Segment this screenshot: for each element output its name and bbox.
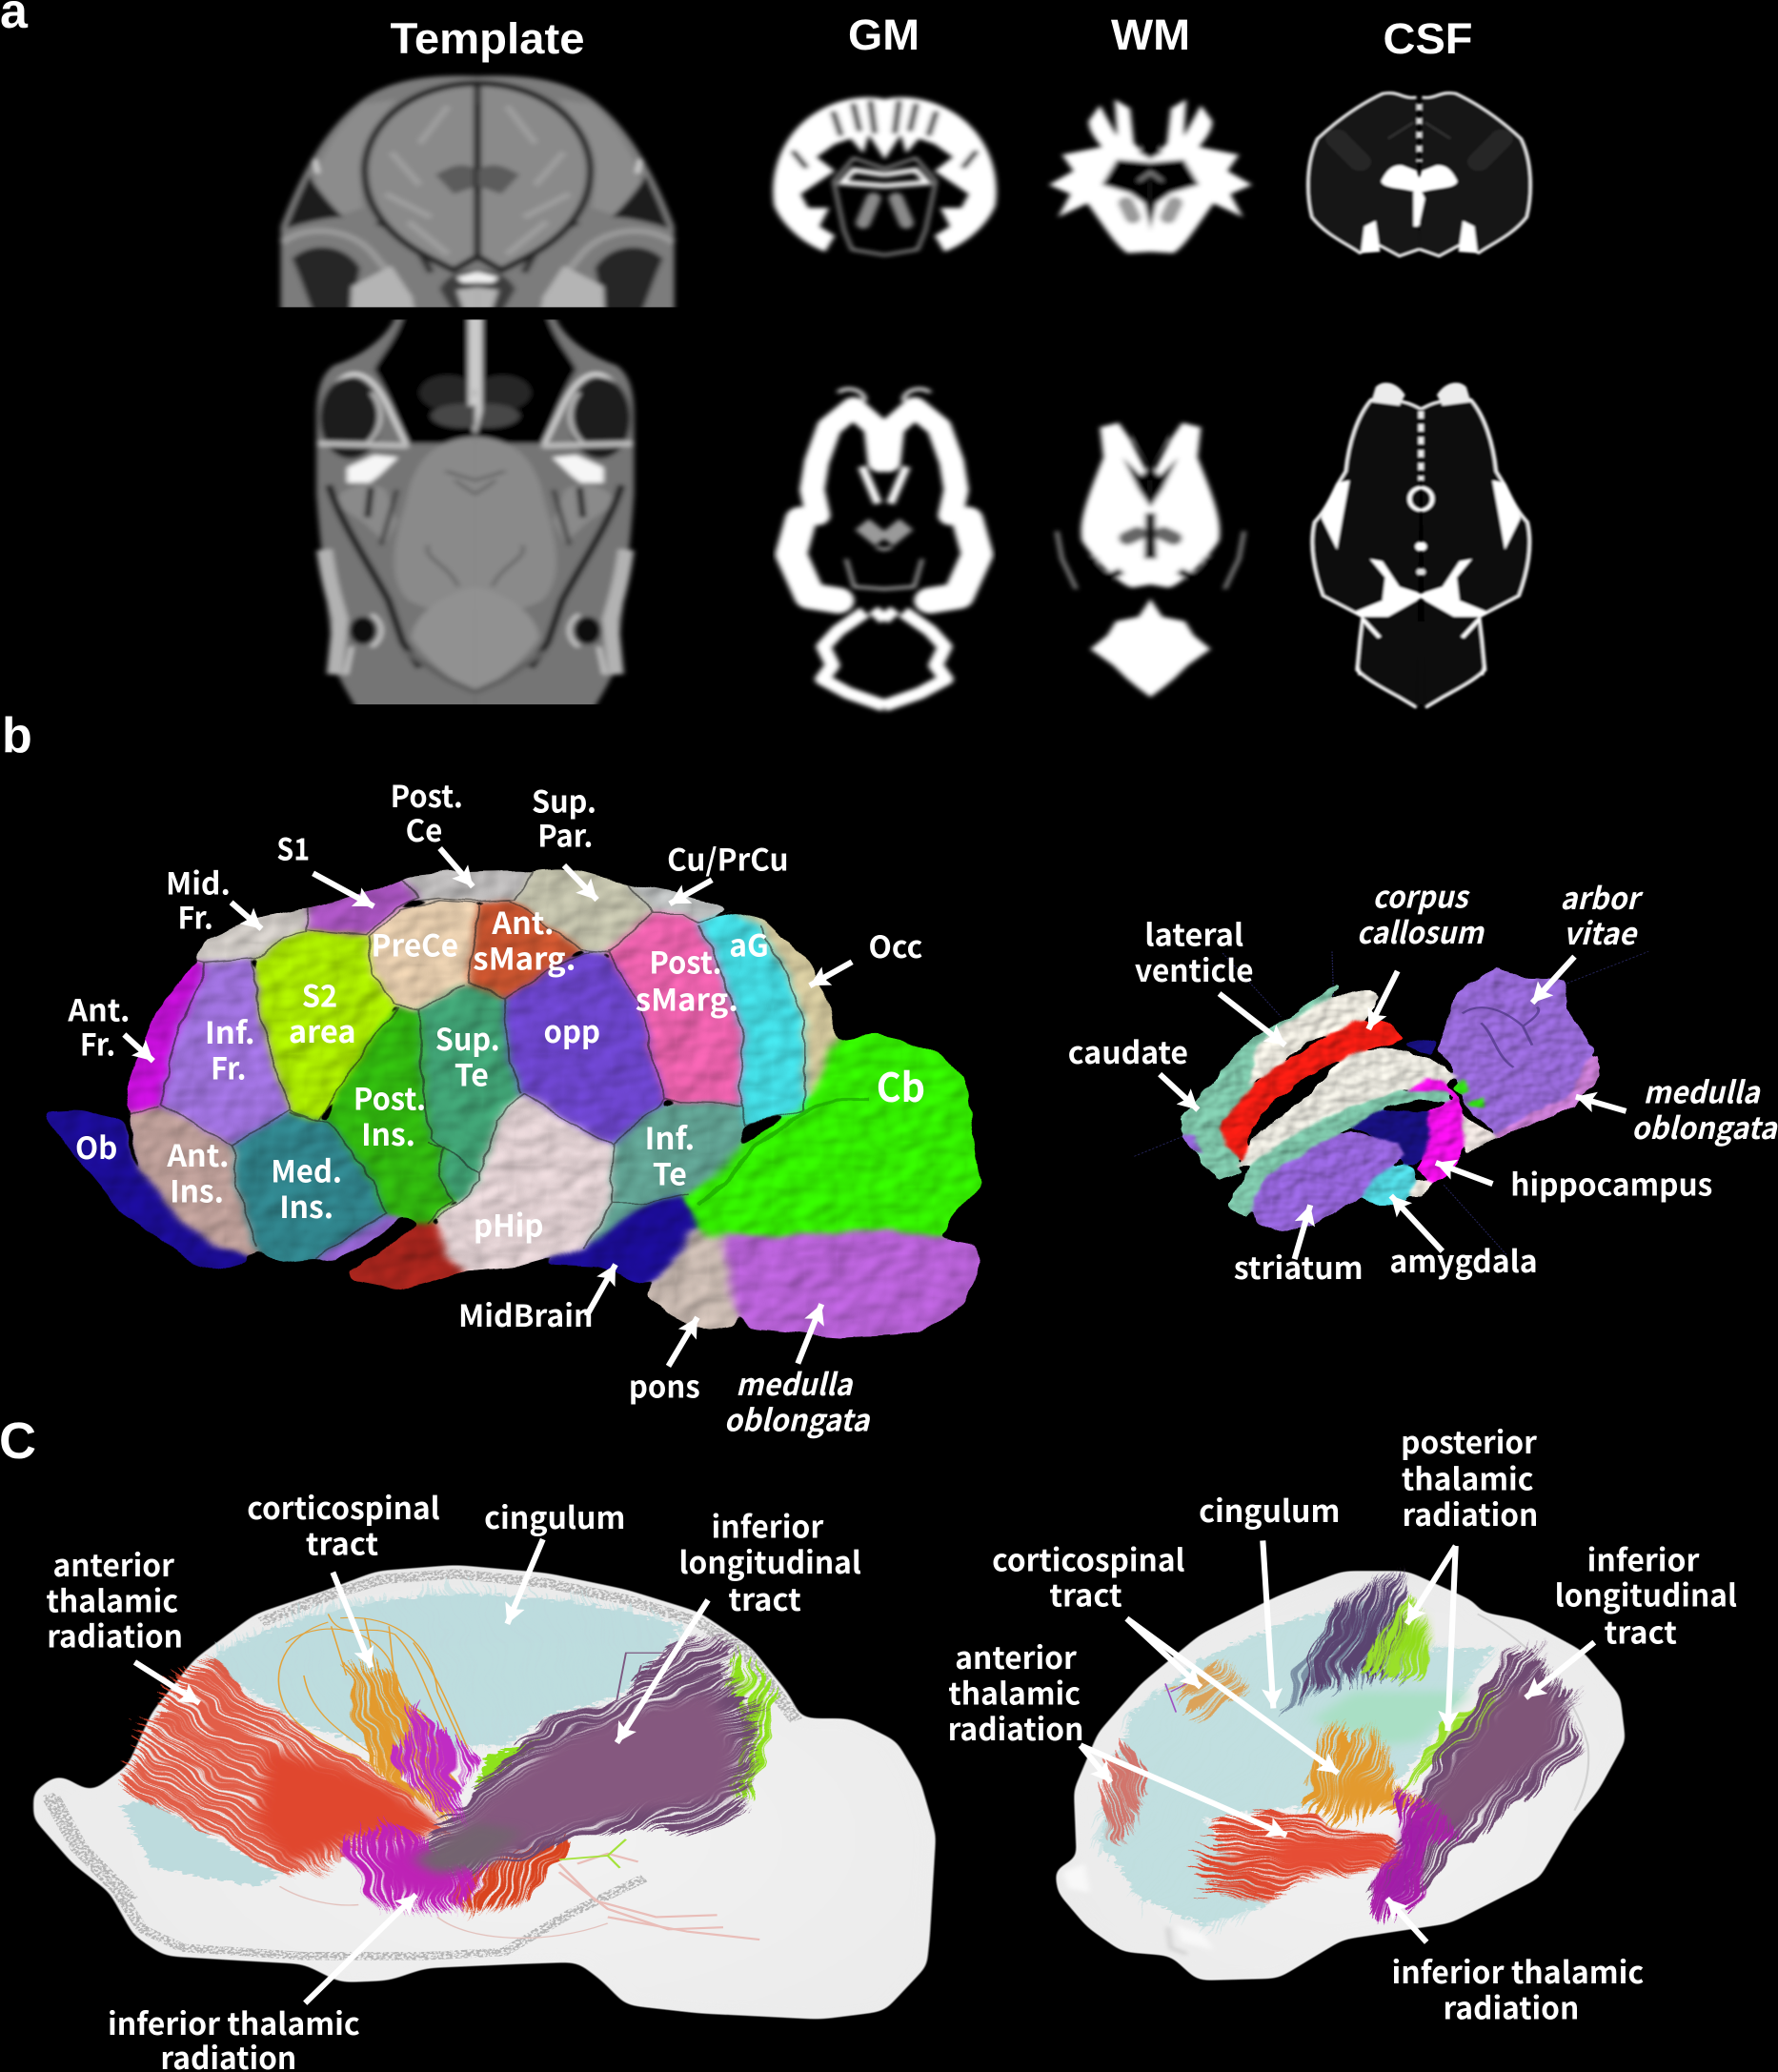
label: anterior thalamic radiation [948, 1635, 1286, 1836]
tract: green top [1331, 1575, 1460, 1689]
region: Sup. Te [418, 985, 522, 1201]
region: Occ [731, 907, 834, 1098]
structure: corpus callosum [1221, 1022, 1404, 1163]
label: striatum: striatum [1234, 1245, 1364, 1289]
label: inferior longitudinal tract: tract [729, 1576, 801, 1620]
label: Ob: Ob [75, 1125, 117, 1168]
tract: anterior thalamic fibres [1186, 1790, 1413, 1921]
label: Ant. Ins.: Ant. [166, 1132, 230, 1176]
label: MidBrain [458, 1265, 616, 1336]
WM axial map [1057, 416, 1244, 698]
label: amygdala [1389, 1196, 1538, 1282]
label: Ant. Ins. [166, 1132, 230, 1212]
panel letter b: b [2, 708, 32, 763]
label: anterior thalamic radiation: thalamic [948, 1670, 1081, 1714]
label: caudate: caudate [1068, 1029, 1188, 1073]
region: Inf. Fr. [161, 961, 290, 1145]
label: hippocampus: hippocampus [1510, 1162, 1712, 1206]
label: S2 area [289, 972, 356, 1052]
label: opp: opp [543, 1008, 600, 1052]
label: anterior thalamic radiation: radiation [47, 1614, 183, 1657]
structure: hippocampus [1411, 1077, 1465, 1184]
tract: corticospinal fibres [1270, 1704, 1459, 1843]
label: Post. Ce: Ce [406, 807, 442, 851]
template coronal slice [281, 75, 675, 333]
tract: green mid [1337, 1646, 1573, 1828]
tract: inferior longitudinal core [1413, 1683, 1561, 1847]
label: cingulum [484, 1494, 625, 1624]
label: posterior thalamic radiation: radiation [1403, 1492, 1538, 1535]
label: aG: aG [729, 923, 769, 966]
region: MidBrain [541, 1196, 698, 1285]
label: anterior thalamic radiation: anterior [52, 1542, 174, 1586]
subcortical surface rendering [1134, 951, 1648, 1255]
tract: small orange strands [1139, 1631, 1288, 1744]
tract: green centre [474, 1737, 541, 1790]
label: Ant. sMarg.: Ant. [491, 900, 555, 944]
tract blend core [414, 1823, 523, 1874]
tract: cingulum fibres [917, 1473, 1678, 2055]
label: MidBrain: MidBrain [458, 1292, 593, 1336]
label: inferior longitudinal tract [1525, 1536, 1737, 1697]
region: aG [702, 912, 805, 1125]
brain surface parcellation [44, 867, 984, 1338]
structure: amygdala [1360, 1165, 1416, 1208]
region: Cb [689, 1034, 982, 1247]
tract: inferior thalamic fibres [1322, 1771, 1510, 1940]
region: S2 area [257, 930, 393, 1121]
silhouette speckled rim [49, 1574, 797, 1956]
tract: anterior thalamic core [1279, 1839, 1391, 1872]
region: Ob [44, 1109, 252, 1271]
label: inferior thalamic radiation: inferior thalamic [1391, 1949, 1644, 1993]
heading: WM: WM [1111, 10, 1190, 59]
label: Sup. Par. [532, 779, 597, 900]
label: corticospinal tract [247, 1485, 440, 1668]
template axial slice [316, 305, 634, 721]
tract rendering right [917, 1473, 1720, 2055]
label: Med. Ins.: Med. [271, 1148, 342, 1192]
tract: inferior thalamic lower core [376, 1839, 462, 1897]
label: anterior thalamic radiation [47, 1542, 199, 1703]
strands near top of ILF [616, 1653, 665, 1700]
tract: inferior longitudinal fibres [1224, 1575, 1720, 1963]
tract: anterior thalamic radiation lower [413, 1815, 599, 1941]
label: inferior longitudinal tract: inferior [1587, 1536, 1700, 1580]
glass brain silhouette [1055, 1571, 1626, 1981]
label: anterior thalamic radiation: radiation [948, 1706, 1083, 1750]
label: Cb: Cb [877, 1056, 925, 1113]
label: Med. Ins.: Ins. [279, 1184, 333, 1228]
label: inferior longitudinal tract: longitudinal [679, 1539, 861, 1583]
label: medulla oblongata: oblongata [724, 1396, 871, 1440]
tract: inferior thalamic upper [360, 1698, 503, 1833]
label: Med. Ins. [271, 1148, 342, 1228]
structure: cream small [1411, 1179, 1432, 1198]
label: Post. Ins.: Ins. [361, 1111, 415, 1155]
label: corticospinal tract: tract [306, 1521, 378, 1565]
cerebellum fold [702, 1098, 870, 1205]
label: S2 area: S2 [302, 972, 337, 1016]
region: medulla oblongata [721, 1229, 984, 1338]
label: inferior thalamic radiation: radiation [1444, 1984, 1579, 2028]
faint axis lines [1134, 951, 1648, 1255]
label: striatum [1234, 1205, 1364, 1289]
tract: corticospinal core [1326, 1770, 1397, 1809]
label: lateral venticle: lateral [1144, 912, 1243, 956]
CSF coronal map [1308, 92, 1531, 256]
region: pHip [438, 1094, 616, 1271]
label: posterior thalamic radiation: thalamic [1402, 1456, 1533, 1500]
tract: inferior longitudinal fibres [248, 1529, 925, 1986]
label: amygdala: amygdala [1389, 1238, 1538, 1282]
label: inferior longitudinal tract: longitudinal [1555, 1573, 1737, 1616]
label: Mid. Fr.: Fr. [177, 895, 213, 939]
labels and arrows [47, 1485, 861, 2072]
label: PreCe: PreCe [372, 923, 458, 966]
label: pHip: pHip [474, 1203, 543, 1247]
inner contour of cerebellum [1478, 1614, 1588, 1811]
label: Post. sMarg.: Post. [649, 940, 722, 984]
structure: medulla oblongata [1495, 1055, 1600, 1139]
label: Post. sMarg. [636, 940, 738, 1021]
label: medulla oblongata: medulla [1644, 1069, 1762, 1113]
tract: cingulum fibres [163, 1539, 724, 1820]
label: pons [629, 1317, 700, 1408]
label: corticospinal tract [992, 1536, 1338, 1773]
label: corticospinal tract: corticospinal [247, 1485, 440, 1529]
tract: posterior thalamic top [1263, 1556, 1445, 1713]
panel b: cortical atlas left view [2, 708, 984, 1440]
panel a: template and tissue maps [0, 0, 1531, 721]
label: inferior longitudinal tract [616, 1504, 861, 1743]
panel b: subcortical structures right view [1068, 873, 1778, 1289]
label: S1 [276, 825, 374, 906]
label: Ant. Ins.: Ins. [170, 1168, 224, 1212]
tract: green top core [1397, 1614, 1426, 1659]
tract: corticospinal core [267, 1636, 535, 1845]
label: Mid. Fr. [166, 861, 261, 939]
label: Sup. Te: Te [455, 1052, 489, 1096]
labels and arrows [948, 1419, 1737, 2028]
structure: navy midbrain [1351, 1110, 1434, 1166]
region: pons [644, 1229, 737, 1330]
region: Post. Ins. [329, 1008, 451, 1223]
label: Post. Ins.: Post. [354, 1075, 426, 1119]
region: Ant. sMarg. [467, 899, 583, 997]
heading: CSF: CSF [1384, 14, 1473, 63]
structure: green fragments [1453, 1079, 1484, 1107]
region seams [129, 870, 805, 1258]
region: PreCe [367, 901, 476, 1009]
tract: anterior thalamic radiation core [255, 1749, 437, 1864]
region: Cu/PrCu [628, 884, 728, 921]
label: Inf. Fr. [205, 1009, 255, 1089]
label: corticospinal tract: corticospinal [992, 1536, 1185, 1580]
label: cingulum: cingulum [1199, 1488, 1340, 1532]
structure: lateral ventricle upper [1248, 989, 1379, 1087]
region: Mid. Fr. [196, 906, 309, 963]
label: Inf. Te: Inf. [645, 1115, 695, 1159]
label: lateral venticle: venticle [1135, 947, 1254, 991]
label: Inf. Fr.: Fr. [211, 1046, 247, 1089]
region: Sup. Par. [515, 867, 651, 952]
label: medulla oblongata [724, 1304, 871, 1440]
tract rendering left [0, 1529, 936, 2020]
heading: GM: GM [848, 10, 919, 59]
label: corpus callosum [1357, 873, 1485, 1029]
GM axial map [791, 389, 978, 706]
arbor vitae folds [1463, 1007, 1539, 1067]
label: anterior thalamic radiation: anterior [955, 1635, 1077, 1678]
label: cingulum: cingulum [484, 1494, 625, 1538]
label: Ant. Fr. [67, 987, 153, 1066]
label: medulla oblongata [1576, 1069, 1778, 1148]
label: inferior thalamic radiation [1387, 1899, 1644, 2028]
label: Ant. Fr.: Ant. [67, 987, 131, 1031]
label: S1: S1 [276, 825, 310, 869]
label: pons: pons [629, 1364, 700, 1408]
label: medulla oblongata: medulla [736, 1361, 854, 1405]
region: opp [506, 951, 663, 1145]
label: Cu/PrCu [667, 837, 789, 904]
structure: caudate lower [1227, 1089, 1448, 1217]
tract: inferior longitudinal core [444, 1692, 738, 1864]
region: Inf. Te [586, 1105, 747, 1247]
region: ventral purple [315, 1216, 399, 1263]
tract: inferior thalamic lower fibres [318, 1798, 520, 1931]
faint pink tracts [559, 1854, 759, 1940]
label: inferior longitudinal tract: tract [1605, 1610, 1677, 1654]
region: Post. sMarg. [609, 914, 744, 1103]
label: cingulum [1199, 1488, 1340, 1708]
label: Occ [810, 924, 922, 985]
structure: arbor vitae [1437, 967, 1593, 1134]
label: Ant. sMarg.: sMarg. [473, 936, 576, 980]
tract: anterior thalamic strands left [1065, 1727, 1189, 1854]
label: Occ: Occ [868, 924, 922, 967]
tract: anterior thalamic radiation strands [0, 1546, 616, 1989]
structure: cream posterior [1458, 1112, 1497, 1153]
label: Inf. Te [645, 1115, 695, 1195]
tract: cingulum base [1101, 1602, 1494, 1925]
nose bulbs [1063, 1864, 1214, 1954]
label: Sup. Par.: Sup. [532, 779, 596, 823]
label: caudate [1068, 1029, 1198, 1109]
tract: cingulum base [122, 1594, 680, 1886]
label: posterior thalamic radiation: posterior [1401, 1419, 1537, 1463]
region: Med. Ins. [232, 1111, 387, 1263]
WM coronal map [1049, 99, 1252, 254]
corticospinal fine strands [278, 1614, 468, 1774]
label: corpus callosum: callosum [1357, 909, 1485, 953]
label: inferior longitudinal tract: inferior [712, 1504, 823, 1548]
region: Post. Ce [402, 870, 528, 901]
label: lateral venticle [1135, 912, 1285, 1046]
label: corpus callosum: corpus [1372, 873, 1470, 917]
label: arbor vitae [1532, 875, 1644, 1003]
region: Ant. Ins. [129, 1105, 257, 1256]
label: Sup. Te [435, 1016, 500, 1096]
label: Post. Ins. [354, 1075, 426, 1155]
label: Inf. Te: Te [653, 1151, 687, 1195]
structure: striatum [1250, 1131, 1404, 1232]
structure: lateral ventricle lower [1239, 1046, 1458, 1166]
labels and arrows [67, 773, 925, 1440]
label: Ant. Fr.: Fr. [80, 1022, 115, 1066]
region: S1 [309, 879, 418, 935]
structure: caudate [1181, 985, 1342, 1180]
label: Post. Ce [391, 773, 473, 886]
label: Cu/PrCu: Cu/PrCu [667, 837, 789, 881]
label: posterior thalamic radiation [1401, 1419, 1538, 1731]
tract: inferior thalamic core [1381, 1823, 1429, 1909]
panel letter C: C [0, 1412, 36, 1470]
label: inferior thalamic radiation [108, 1895, 416, 2072]
label: Mid. Fr.: Mid. [166, 861, 231, 904]
panel c: tractography left view [0, 1412, 936, 2072]
label: arbor vitae: arbor [1560, 875, 1644, 919]
purple strand [1165, 1683, 1187, 1713]
label: anterior thalamic radiation: thalamic [47, 1577, 178, 1621]
GM coronal map [773, 97, 997, 255]
label: S2 area: area [289, 1008, 356, 1052]
structure: dark navy stub [1406, 1039, 1434, 1055]
label: Sup. Te: Sup. [435, 1016, 500, 1060]
label: corticospinal tract: tract [1049, 1573, 1122, 1616]
label: arbor vitae: vitae [1564, 910, 1638, 954]
panel c: tractography right view [917, 1419, 1737, 2055]
tract: slate overlap [1230, 1562, 1456, 1739]
glass brain silhouette [33, 1565, 936, 2020]
green strands lower [559, 1839, 626, 1868]
label: Post. Ce: Post. [391, 773, 463, 817]
labels and arrows [1068, 873, 1778, 1289]
region: red ventral structure [348, 1216, 464, 1291]
region: Ant. Fr. [126, 963, 205, 1114]
CSF axial map [1312, 383, 1530, 708]
label: Ant. sMarg. [473, 900, 576, 980]
label: Sup. Par.: Par. [537, 813, 593, 857]
label: Inf. Fr.: Inf. [205, 1009, 255, 1053]
tract: pale green band [1311, 1692, 1472, 1745]
label: inferior thalamic radiation: inferior thalamic [108, 2001, 360, 2044]
label: Post. sMarg.: sMarg. [636, 977, 738, 1021]
structure: left purple fragment [1183, 1134, 1202, 1153]
tract: green right side [690, 1657, 810, 1800]
heading: Template: Template [391, 14, 585, 63]
